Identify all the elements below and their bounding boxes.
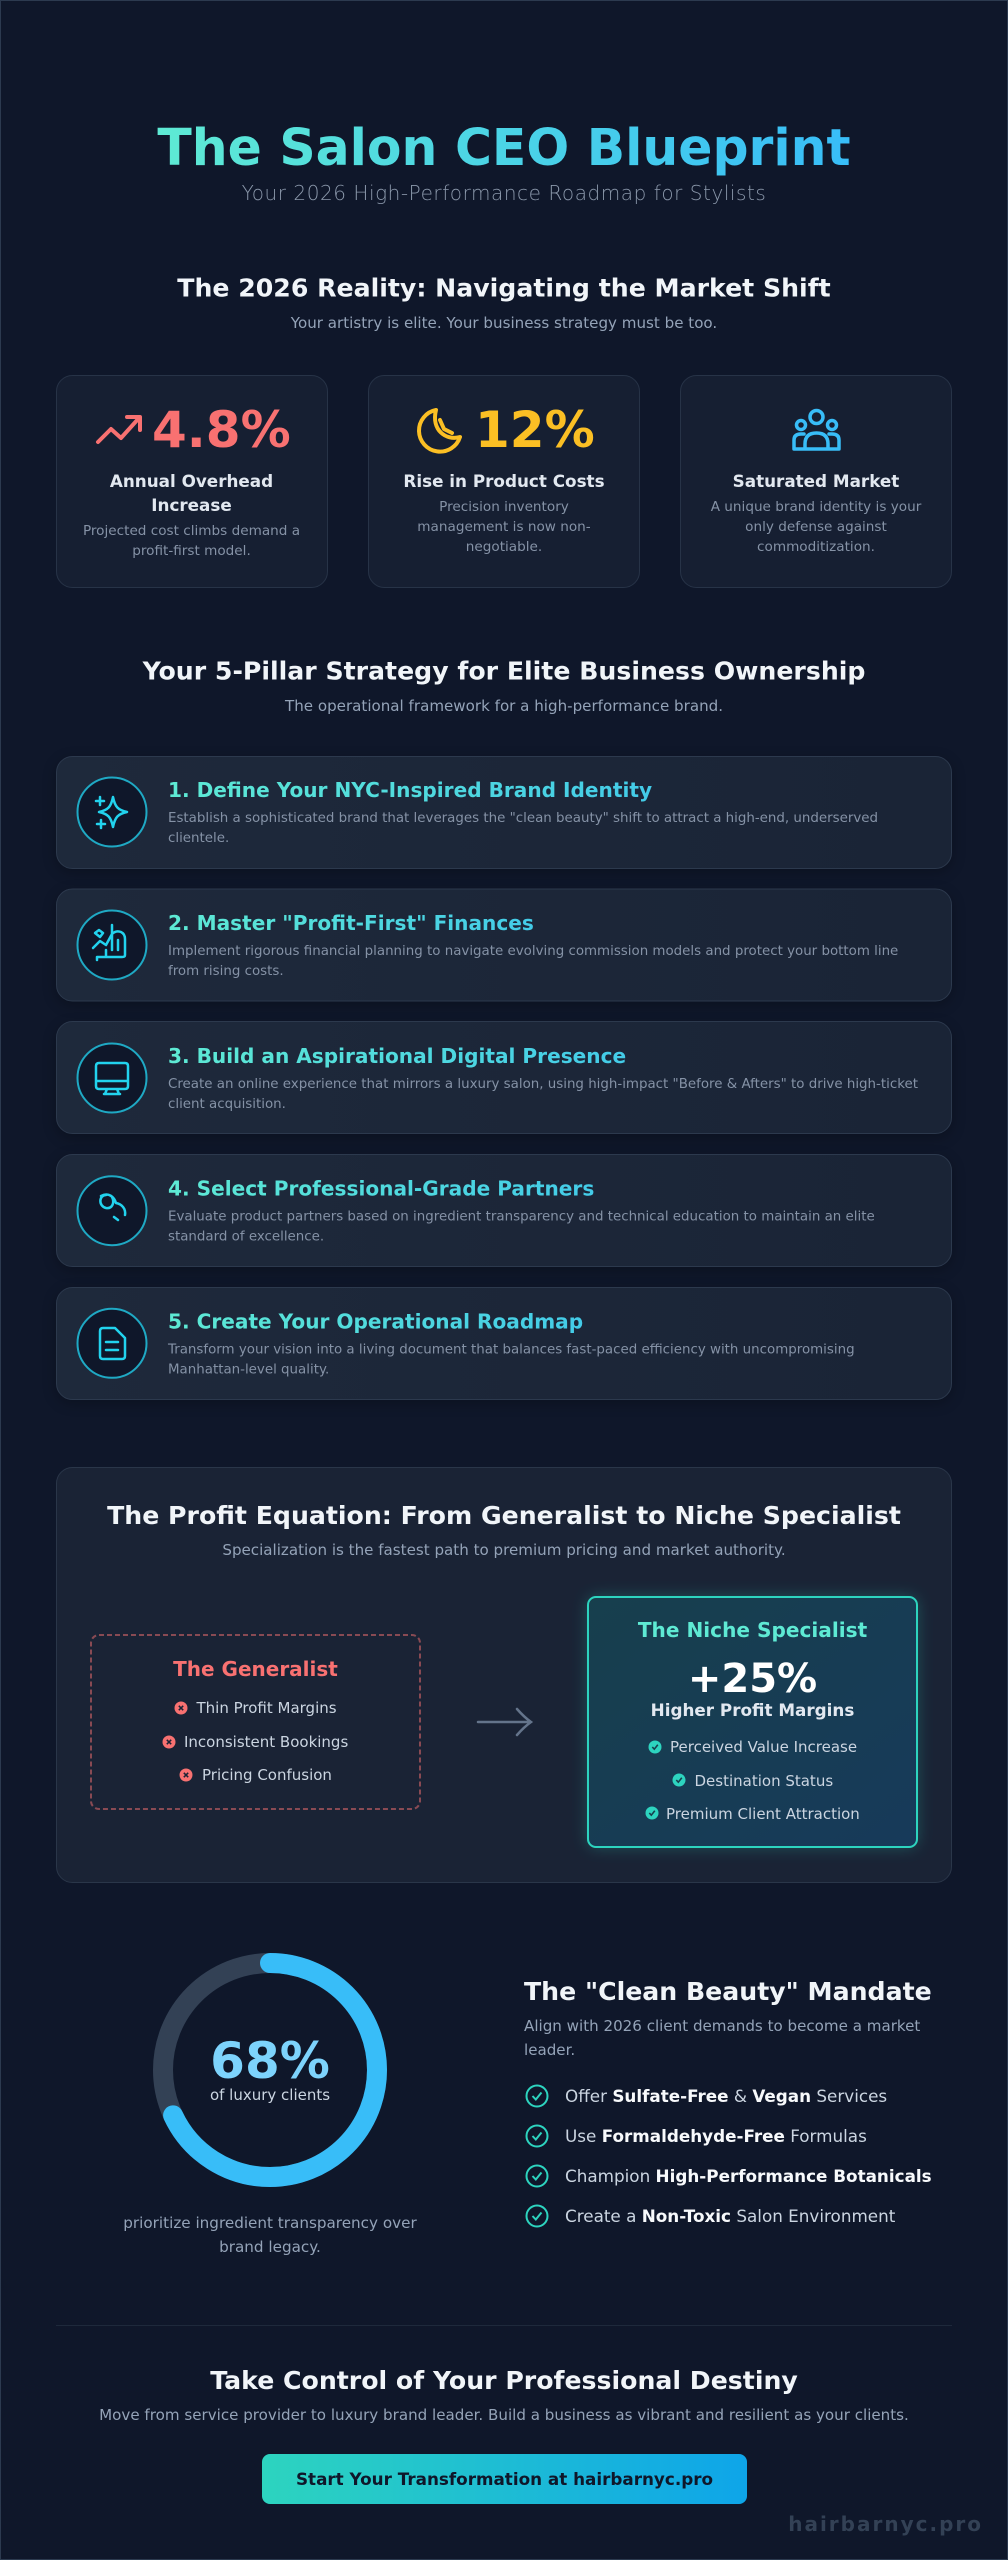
pillar text: 1. Define Your NYC-Inspired Brand Identity: [168, 778, 652, 802]
panel: the niche specialist: The Niche Specialist: [638, 1618, 868, 1642]
card text: Annual Overhead: [110, 471, 273, 491]
card text: profit-first model.: [132, 543, 251, 559]
clean beauty description: Align with 2026 client demands to become a market: [524, 2017, 920, 2035]
closing heading: Take Control of Your Professional Destiny: [210, 2366, 798, 2395]
pillar text: clientele.: [168, 831, 229, 846]
section heading: market reality: The 2026 Reality: Navigating the Market Shift: [177, 274, 831, 302]
section heading: 5-pillar strategy: [142, 656, 865, 715]
closing text: Move from service provider to luxury brand leader. Build a business as vibrant and resilient as your clients.: [99, 2406, 909, 2424]
pillar text: Establish a sophisticated brand that leverages the "clean beauty" shift to attract a high-end, underserved: [168, 811, 878, 826]
card text: A unique brand identity is your: [711, 499, 922, 515]
card text: Increase: [151, 495, 232, 515]
pillar text: Create an online experience that mirrors a luxury salon, using high-impact "Before & Afters" to drive high-ticket: [168, 1077, 918, 1092]
card text: commoditization.: [757, 539, 875, 555]
donut chart: 68%: of luxury clients: [210, 2086, 330, 2104]
card text: management is now non-: [417, 519, 591, 535]
icon: moon: [419, 410, 460, 452]
section heading: market reality: Your artistry is elite. Your business strategy must be too.: [290, 314, 717, 332]
icon: product and chart: [78, 910, 146, 980]
list item: Pricing Confusion: [202, 1766, 332, 1784]
clean beauty description: [524, 2017, 920, 2059]
checklist: [526, 2086, 932, 2226]
panel: the generalist: [91, 1635, 420, 1809]
pillar text: [168, 1044, 918, 1112]
pillar text: 3. Build an Aspirational Digital Presence: [168, 1044, 626, 1068]
card text: only defense against: [745, 519, 887, 535]
pillar text: Implement rigorous financial planning to navigate evolving commission models and protect your bottom line: [168, 944, 898, 959]
panel: profit equation: [56, 1468, 952, 1882]
title: The Salon CEO Blueprint: [157, 118, 851, 177]
card text: [83, 471, 300, 559]
pillar text: Evaluate product partners based on ingredient transparency and technical education to maintain an elite: [168, 1210, 875, 1224]
pillar text: Manhattan-level quality.: [168, 1362, 329, 1378]
pillar text: 2. Master "Profit-First" Finances: [168, 911, 534, 935]
call to action button: [262, 2454, 747, 2504]
card text: Projected cost climbs demand a: [83, 523, 300, 539]
panel: the niche specialist: [588, 1597, 917, 1847]
stat: +25%: +25%: [688, 1656, 817, 1702]
clean beauty description: leader.: [524, 2041, 575, 2059]
card text: Rise in Product Costs: [403, 471, 605, 491]
panel: pillar 3: [56, 1022, 952, 1138]
check item: Create a Non-Toxic Salon Environment: [565, 2206, 896, 2226]
list item: Premium Client Attraction: [666, 1805, 860, 1823]
donut chart: 68%: 68%: [210, 2032, 330, 2090]
check item: Use Formaldehyde-Free Formulas: [565, 2126, 867, 2146]
call to action button: Start Your Transformation at hairbarnyc.pro: [296, 2469, 713, 2489]
pillar text: [168, 1176, 875, 1244]
donut caption: [123, 2214, 417, 2256]
subtitle: Your 2026 High-Performance Roadmap for Stylists: [242, 181, 766, 205]
pillar text: 5. Create Your Operational Roadmap: [168, 1310, 583, 1334]
panel: saturated market card: [680, 376, 952, 588]
panel: pillar 1: [56, 756, 952, 872]
icon: people group: [794, 410, 839, 449]
pillar text: [167, 1310, 855, 1378]
panel: the niche specialist: Higher Profit Margins: [651, 1700, 854, 1720]
panel: pillar 4: [56, 1154, 952, 1270]
icon: monitor: [78, 1044, 146, 1112]
check item: Offer Sulfate-Free & Vegan Services: [565, 2086, 887, 2106]
arrow: [478, 1709, 531, 1735]
list item: Inconsistent Bookings: [184, 1733, 348, 1751]
pillar text: standard of excellence.: [168, 1230, 324, 1244]
donut caption: prioritize ingredient transparency over: [123, 2214, 417, 2232]
pillar text: client acquisition.: [168, 1097, 286, 1112]
icon: sparkle: [78, 778, 146, 846]
icon: partner loop: [78, 1176, 146, 1245]
panel: product costs stat card: [368, 376, 640, 588]
section heading: market reality: [177, 274, 831, 332]
card text: [711, 471, 922, 555]
pillar text: Transform your vision into a living document that balances fast-paced efficiency with uncompromising: [167, 1342, 855, 1358]
donut chart: 68%: [163, 1963, 377, 2177]
list item: Perceived Value Increase: [670, 1738, 857, 1756]
panel: pillar 2: [56, 889, 952, 1005]
pillar text: [168, 778, 878, 846]
clean beauty heading: The "Clean Beauty" Mandate: [524, 1977, 932, 2006]
list item: Thin Profit Margins: [196, 1699, 337, 1717]
card text: Precision inventory: [439, 499, 569, 515]
subheading: Specialization is the fastest path to premium pricing and market authority.: [222, 1541, 786, 1559]
icon: document: [78, 1309, 146, 1378]
section heading: 5-pillar strategy: Your 5-Pillar Strategy for Elite Business Ownership: [142, 656, 865, 686]
pillar text: from rising costs.: [168, 964, 284, 979]
stat: 12%: 12%: [475, 401, 595, 459]
donut caption: brand legacy.: [219, 2238, 321, 2256]
pillar text: [168, 911, 898, 979]
card text: negotiable.: [466, 539, 542, 555]
section heading: 5-pillar strategy: The operational framework for a high-performance brand.: [284, 697, 723, 715]
panel: overhead stat card: [56, 376, 328, 588]
check item: Champion High-Performance Botanicals: [565, 2166, 932, 2186]
stat: 4.8%: 4.8%: [152, 401, 291, 459]
panel: the generalist: The Generalist: [173, 1657, 338, 1681]
icon: trending up: [98, 417, 140, 442]
card text: [403, 471, 605, 555]
heading: The Profit Equation: From Generalist to Niche Specialist: [107, 1501, 901, 1530]
list item: Destination Status: [694, 1772, 833, 1790]
panel: pillar 5: [56, 1288, 952, 1403]
pillar text: 4. Select Professional-Grade Partners: [168, 1176, 594, 1200]
watermark: hairbarnyc.pro: [788, 2512, 983, 2536]
card text: Saturated Market: [733, 471, 899, 491]
